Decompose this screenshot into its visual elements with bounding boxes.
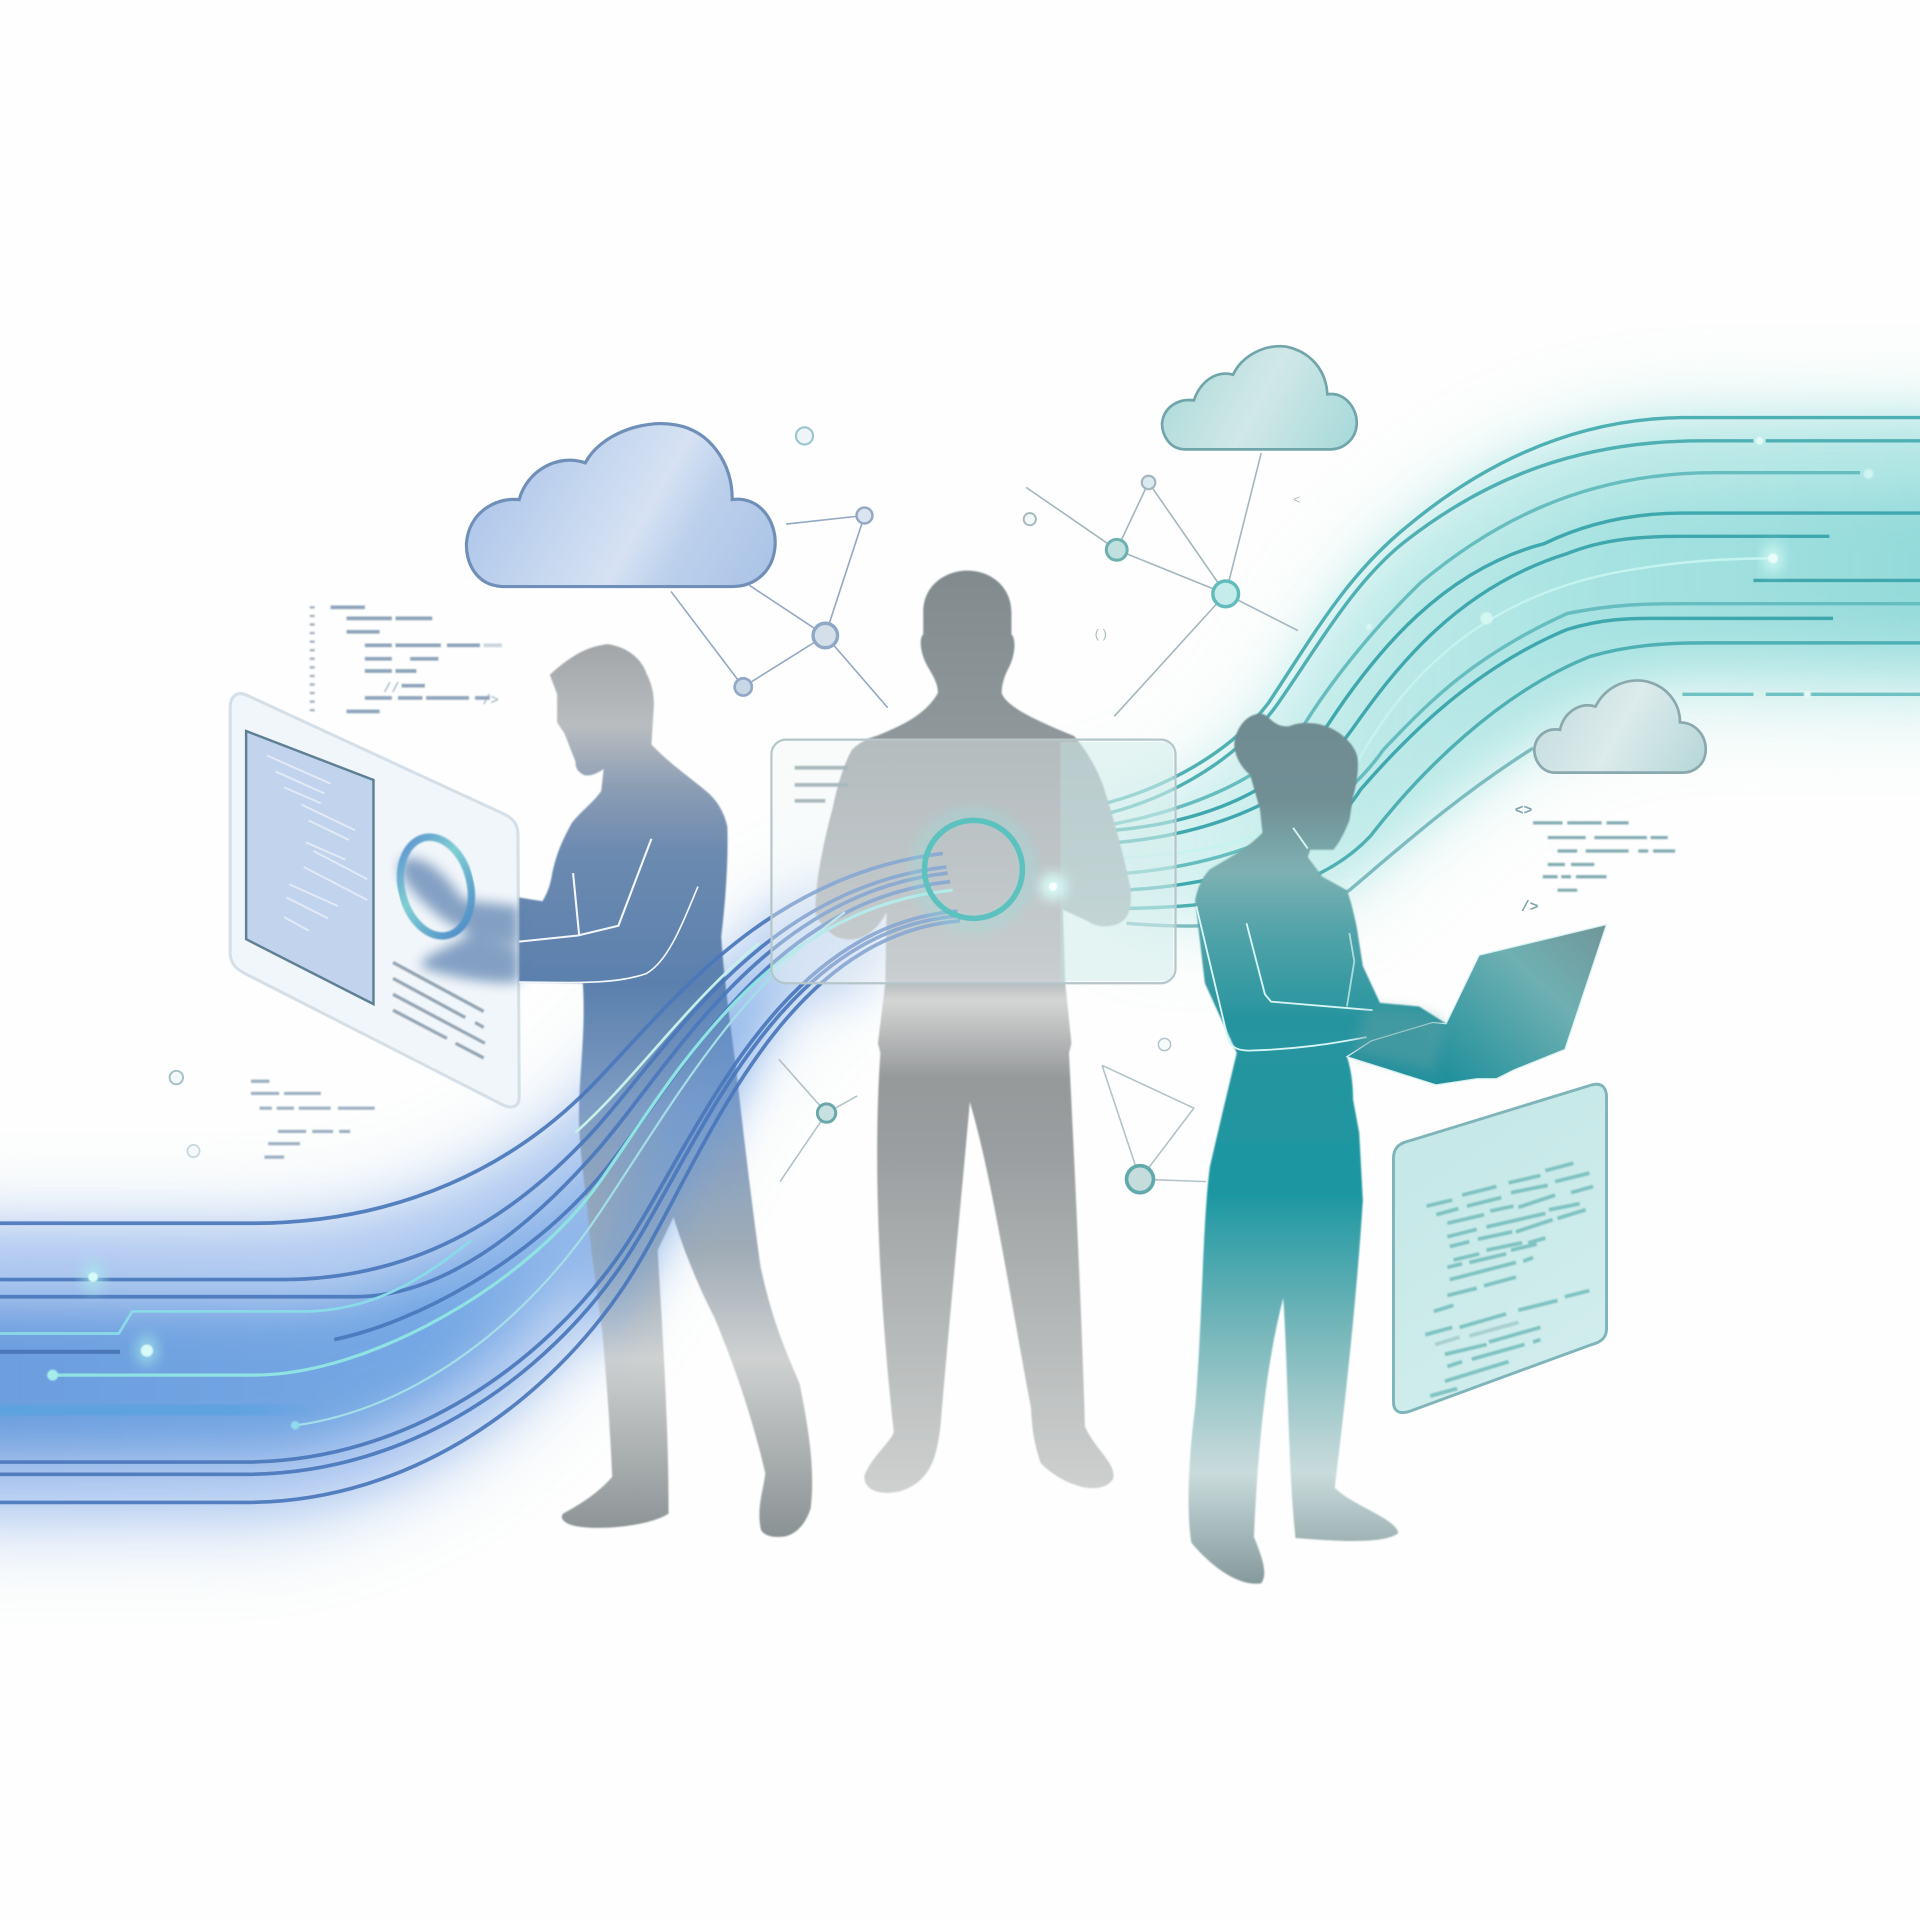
left code snippet bbox=[312, 606, 502, 713]
blue glow band bbox=[0, 853, 960, 1531]
left code snippet: // bbox=[383, 682, 399, 697]
cloud: large blue bbox=[466, 424, 775, 587]
small floating glyphs: < bbox=[1293, 493, 1300, 507]
right code snippet: <> bbox=[1515, 803, 1533, 819]
reaching hands bbox=[400, 858, 519, 983]
blue tint crossing left man bbox=[576, 967, 784, 1359]
left floating panel bbox=[230, 694, 519, 1107]
left man silhouette bbox=[400, 644, 812, 1537]
glowing data points on blue stream bbox=[47, 1261, 299, 1430]
inner code screen bbox=[246, 731, 373, 1004]
cloud: right small bbox=[1534, 680, 1706, 773]
teal scanner ring and glow bbox=[917, 813, 1067, 926]
small floating glyphs: () bbox=[1093, 628, 1108, 642]
woman arm highlights bbox=[1196, 828, 1373, 1051]
right code snippet bbox=[1515, 803, 1675, 916]
small floating glyphs bbox=[1093, 493, 1300, 642]
document code rows bbox=[1425, 1163, 1593, 1396]
teal data stream lines bbox=[1053, 418, 1920, 926]
blue data stream lines bbox=[0, 853, 960, 1502]
network: upper-right nodes bbox=[1024, 453, 1298, 716]
left man arm highlights bbox=[519, 839, 698, 983]
network: lower nodes bbox=[170, 1038, 1206, 1193]
middle man silhouette bbox=[816, 571, 1131, 1493]
scanner ring on left panel bbox=[391, 830, 481, 944]
right floating code document bbox=[1393, 1084, 1607, 1413]
lower-left code snippet bbox=[251, 1081, 375, 1157]
right code snippet: /> bbox=[1521, 900, 1539, 916]
panel text rows bbox=[795, 768, 849, 801]
glowing data points on teal stream bbox=[1366, 437, 1873, 698]
panel text rows bbox=[393, 962, 485, 1058]
middle translucent panel bbox=[771, 740, 1176, 983]
woman silhouette bbox=[1189, 714, 1446, 1584]
laptop bbox=[1347, 924, 1607, 1085]
network: upper-left nodes bbox=[671, 427, 888, 708]
teal glow band bbox=[1053, 416, 1920, 926]
left code snippet: /> bbox=[482, 694, 499, 709]
cloud: upper teal bbox=[1162, 346, 1357, 449]
cyan highlight stream lines bbox=[0, 890, 953, 1425]
